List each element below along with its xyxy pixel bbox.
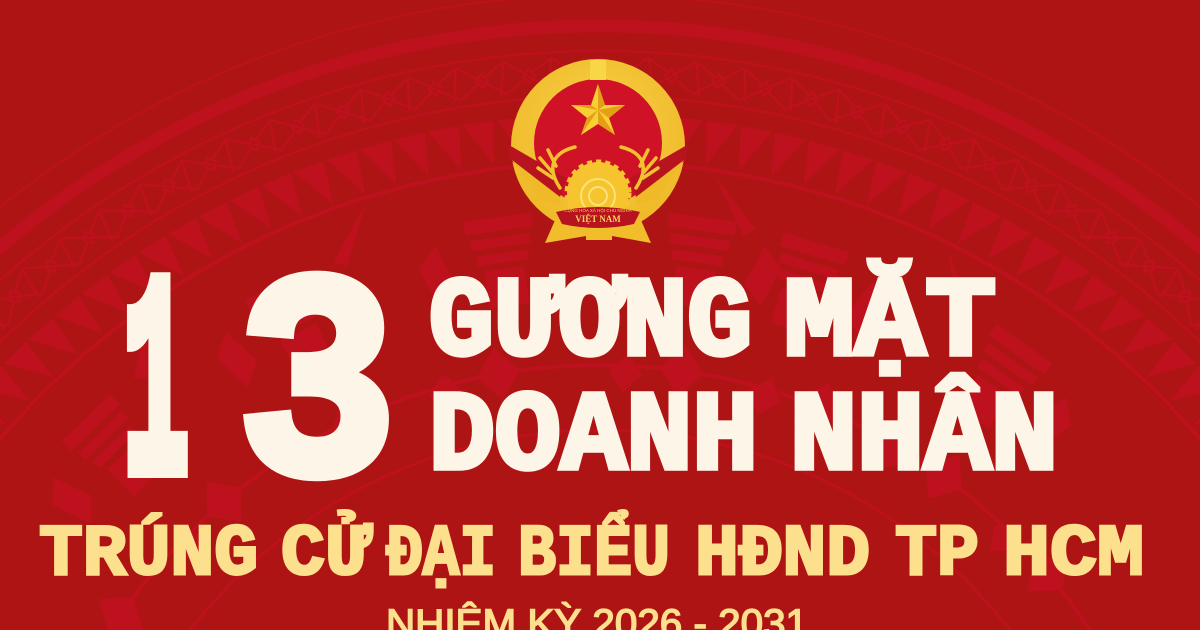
emblem red scroll	[556, 207, 640, 228]
subheading: TP	[895, 514, 979, 596]
emblem small text: CỘNG HÒA XÃ HỘI CHỦ NGHĨA	[564, 207, 632, 213]
emblem text Việt Nam: VIỆT NAM	[575, 214, 621, 224]
subheading: ĐẠI	[386, 514, 496, 596]
heading: gương mặt doanh nhân	[429, 261, 1058, 502]
subheading: HCM	[1003, 514, 1144, 596]
subheading: BIỂU	[518, 510, 670, 596]
emblem gear	[567, 162, 629, 224]
subheading: HĐND	[695, 514, 870, 596]
heading: gương mặt doanh nhân: NHÂN	[790, 375, 1058, 502]
subheading: CỬ	[281, 511, 373, 596]
big number 13: 1	[123, 232, 189, 555]
emblem red ribbons	[509, 145, 687, 197]
big number 13	[123, 229, 397, 560]
emblem top highlight	[590, 60, 606, 80]
heading: gương mặt doanh nhân: MẶT	[784, 261, 996, 388]
big number 13: 3	[237, 229, 397, 560]
emblem gold ring	[511, 59, 685, 233]
subheading: TRÚNG	[39, 513, 258, 596]
icon: national emblem of Vietnam	[509, 59, 687, 243]
heading: gương mặt doanh nhân: DOANH	[429, 375, 758, 502]
subheading	[39, 510, 1144, 596]
emblem gold shoulders	[512, 160, 684, 205]
emblem star	[571, 84, 625, 135]
emblem rice ears	[538, 147, 658, 188]
emblem red disc	[534, 79, 662, 207]
heading: gương mặt doanh nhân: GƯƠNG	[429, 261, 752, 388]
emblem lower ribbon gold	[545, 218, 651, 243]
